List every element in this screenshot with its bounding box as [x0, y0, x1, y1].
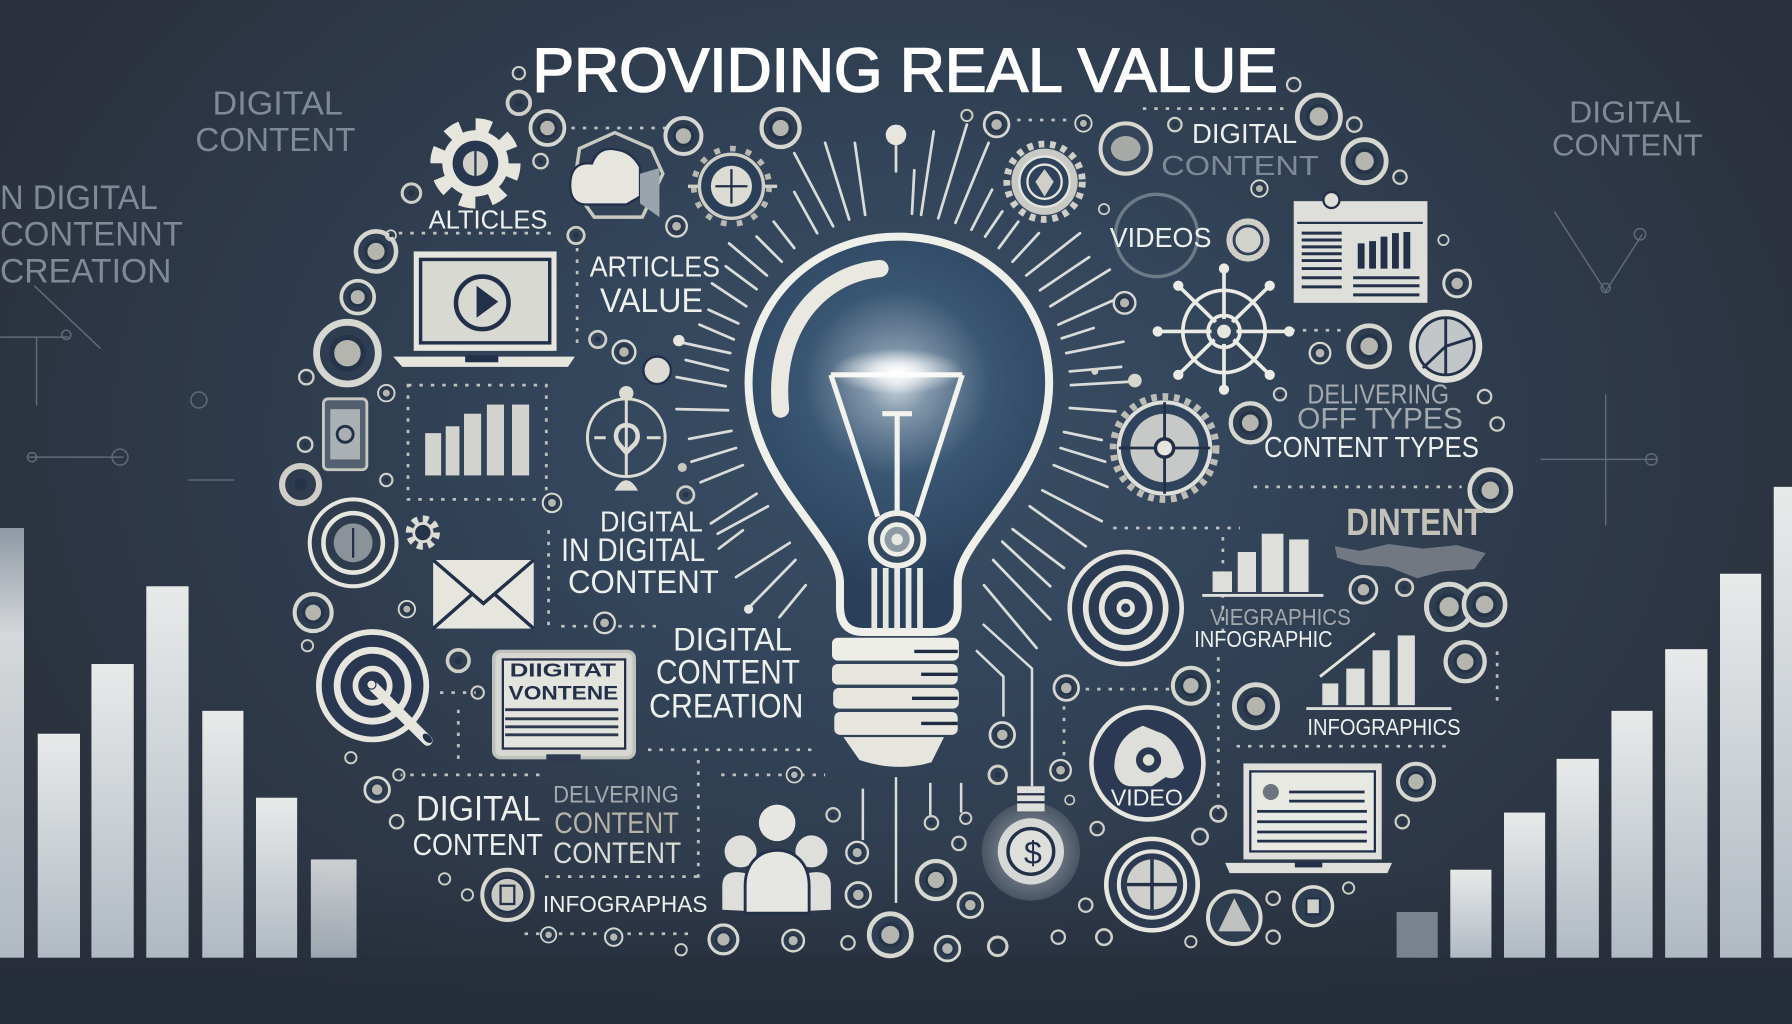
- labels: delivering content types: CONTENT TYPES: [1264, 432, 1479, 464]
- icon: video camera badge: [1091, 707, 1203, 819]
- icon: small gear: [409, 519, 437, 546]
- labels: digital content top right: [1161, 118, 1319, 181]
- labels: in digital content: DIGITAL: [600, 506, 703, 538]
- icon: square badge: [1294, 887, 1333, 926]
- dotted connectors: [399, 109, 1497, 934]
- label: articles value: [590, 252, 720, 320]
- labels: delivering content content: CONTENT: [553, 837, 681, 870]
- faint side labels: left: DIGITAL: [213, 85, 343, 122]
- labels: in digital content: IN DIGITAL: [561, 532, 705, 568]
- icon: concentric target: [1070, 552, 1182, 664]
- labels: delivering content content: CONTENT: [554, 807, 679, 840]
- label: videos with faint badge: [1110, 194, 1211, 277]
- faint side labels: right: [1552, 94, 1703, 162]
- label: dintent: DINTENT: [1346, 501, 1483, 543]
- label: articles small: ALTICLES: [429, 205, 547, 235]
- rays around the bulb: [673, 125, 1142, 648]
- label: articles value: VALUE: [600, 282, 703, 320]
- labels: digital content creation: CONTENT: [656, 653, 800, 691]
- screw base: [832, 638, 959, 767]
- icon: people group: [722, 805, 831, 913]
- icon: document with chart: [1294, 192, 1427, 303]
- icon: toothed gear top right: [1007, 144, 1082, 219]
- circuit lines: [863, 624, 1032, 903]
- node rings: upper left cluster: [282, 67, 800, 512]
- icon: bar chart top: [1202, 534, 1323, 595]
- icon: small dollar bulb: [982, 786, 1080, 901]
- labels: delivering content types: [1264, 378, 1479, 464]
- icon: phone: [323, 399, 367, 470]
- labels: delivering content types: DELIVERING: [1307, 378, 1449, 409]
- icon: envelope: [433, 560, 534, 629]
- icon: video camera badge: VIDEO: [1111, 785, 1183, 811]
- icon: crosshair: [587, 387, 665, 489]
- icon: bar chart in dotted box: [425, 405, 529, 475]
- labels: digital content lower: [413, 789, 543, 862]
- icon: tablet with text: [494, 651, 634, 761]
- bulb highlight: [780, 269, 880, 409]
- icon: plus circle badge: [1106, 839, 1198, 930]
- icon: tablet with text: VONTENE: [509, 682, 618, 704]
- label: articles value: ARTICLES: [590, 252, 720, 284]
- labels: infographic pair: [1194, 604, 1351, 652]
- labels: delivering content content: [553, 781, 681, 870]
- faint side labels: right: DIGITAL: [1569, 94, 1691, 129]
- labels: digital content lower: CONTENT: [413, 827, 543, 862]
- faint side labels: left: [0, 85, 355, 290]
- faint side labels: left: N DIGITAL: [0, 179, 158, 217]
- icon: large compass gear: [1113, 397, 1216, 499]
- label: infographas: INFOGRAPHAS: [543, 891, 707, 917]
- icon: cloud heart: [570, 133, 663, 217]
- label: videos with faint badge: VIDEOS: [1110, 222, 1211, 253]
- smudged texture under dintent: [1335, 544, 1486, 578]
- icon: ship wheel: [1153, 263, 1294, 395]
- icon: tablet with text: DIIGITAT: [510, 660, 616, 681]
- labels: delivering content types: OFF TYPES: [1297, 403, 1463, 436]
- labels: digital content creation: CREATION: [649, 688, 803, 726]
- labels: digital content lower: DIGITAL: [416, 789, 541, 829]
- filament coil: [871, 513, 923, 566]
- faint side labels: left: CREATION: [0, 252, 171, 290]
- labels: delivering content content: DELVERING: [553, 781, 679, 808]
- icon: small dollar bulb: $: [1024, 835, 1042, 871]
- faint side labels: left: CONTENNT: [0, 216, 183, 254]
- labels: infographic pair: INFOGRAPHIC: [1194, 626, 1333, 652]
- side bar chart: left: [0, 528, 357, 958]
- faint side labels: right: CONTENT: [1552, 127, 1703, 162]
- icon: pie chart: [1409, 310, 1482, 383]
- stem: [874, 568, 920, 630]
- icon: coin ring: [482, 870, 533, 920]
- title: PROVIDING REAL VALUE: [533, 36, 1278, 105]
- icon: round badge: [1101, 123, 1151, 174]
- labels: digital content top right: CONTENT: [1161, 150, 1319, 181]
- icon: rising chart with arrow: [1306, 633, 1451, 709]
- node rings: upper right cluster: [961, 78, 1511, 511]
- bulb glass: [749, 237, 1049, 632]
- label: infographics: INFOGRAPHICS: [1307, 714, 1461, 740]
- side bar chart: right: [1397, 487, 1792, 958]
- faint side network lines: [0, 211, 1657, 526]
- lightbulb: [749, 237, 1049, 767]
- labels: in digital content: [561, 506, 719, 600]
- icon: plus gear: [688, 149, 777, 224]
- labels: digital content creation: [649, 621, 803, 726]
- labels: digital content creation: DIGITAL: [673, 621, 792, 657]
- icon: target with dart: [319, 632, 434, 745]
- icon: gear top left: [438, 126, 513, 201]
- labels: in digital content: CONTENT: [568, 564, 719, 600]
- filament: [831, 375, 962, 517]
- icon: triangle badge: [1208, 891, 1261, 944]
- glow: [831, 349, 963, 394]
- node rings: lower right cluster: [917, 576, 1505, 961]
- icon: large ring left: [310, 499, 397, 586]
- node rings: lower left cluster: [295, 594, 911, 956]
- labels: infographic pair: VIEGRAPHICS: [1210, 604, 1351, 630]
- faint side labels: left: CONTENT: [195, 122, 355, 159]
- icon: laptop with text lines: [1225, 763, 1392, 873]
- icon: laptop with play button: [393, 251, 575, 367]
- labels: digital content top right: DIGITAL: [1192, 118, 1297, 149]
